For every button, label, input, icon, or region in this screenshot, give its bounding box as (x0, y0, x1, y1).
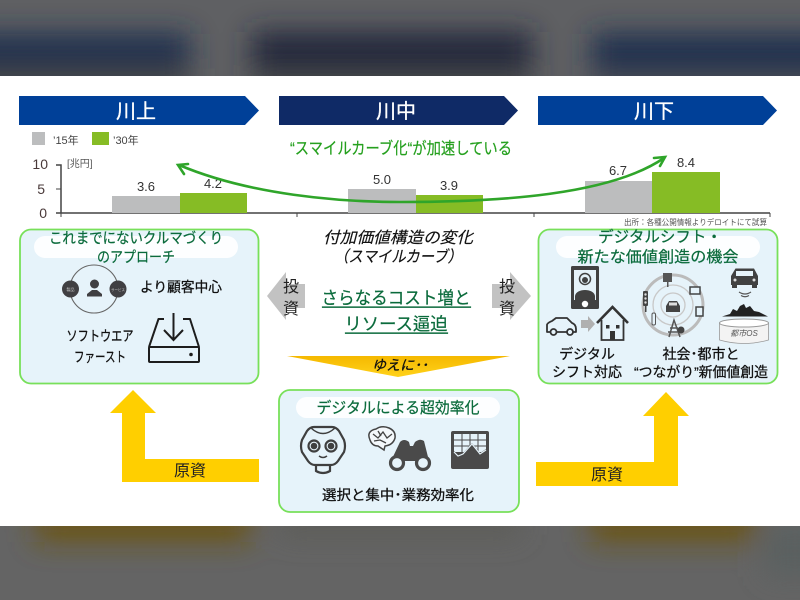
text: customer centric: より顧客中心 (140, 279, 222, 295)
icon: phone with operator (571, 266, 599, 309)
bars downstream: 6.7 (609, 163, 627, 178)
center message: cost and resource pressure: リソース逼迫 (344, 314, 448, 334)
arrow: right funding: 原資 (591, 466, 623, 484)
bars upstream: 4.2 (204, 176, 222, 191)
icon: house (597, 307, 628, 340)
icon: arrow car to house (581, 316, 595, 332)
icon: brain (369, 427, 395, 450)
bar chart (32, 155, 770, 221)
chart legend (32, 132, 139, 147)
arrow: left funding (110, 390, 259, 482)
header: 川下: 川下 (634, 101, 674, 123)
bars upstream (112, 176, 247, 213)
text: digital shift (552, 346, 622, 380)
icon: connected city radar (643, 273, 703, 337)
axis numbers: 5 (37, 181, 45, 197)
center heading: value structure change: 付加価値構造の変化 (323, 229, 474, 247)
arrow: right investment: 投 (499, 278, 515, 296)
center message: cost and resource pressure (322, 288, 471, 334)
right panel heading: デジタルシフト・ (598, 227, 722, 246)
yellow triangle: therefore: ゆえに･･ (372, 357, 428, 373)
panel: left approach (20, 230, 258, 384)
text: software first: ソフトウエア (66, 328, 134, 344)
text: software first (66, 328, 134, 365)
yellow triangle: therefore (287, 356, 510, 377)
smile curve arrow (178, 157, 665, 202)
blurred top background band (0, 0, 800, 76)
icon: mountain chart (451, 431, 489, 469)
arrow: right investment: 資 (499, 300, 515, 318)
panel: digital efficiency (279, 390, 519, 512)
arrow: right funding (536, 392, 689, 486)
icon: car with signal over city OS (720, 268, 768, 344)
bars midstream (348, 172, 483, 213)
arrow: right investment (492, 272, 531, 320)
header: 川中: 川中 (376, 100, 416, 123)
white content area (0, 76, 800, 526)
header: 川下 (538, 96, 777, 125)
blurred bottom background band (0, 526, 800, 600)
icon: customer circle: サービス (111, 287, 125, 292)
bars upstream: 3.6 (137, 179, 155, 194)
bars downstream: 8.4 (677, 155, 695, 170)
icon: customer circle (62, 265, 126, 313)
icon: car with signal over city OS: 都市OS (730, 329, 758, 338)
axis numbers: 0 (39, 205, 47, 221)
text: digital shift: シフト対応 (552, 364, 622, 380)
panel: right opportunity (538, 227, 778, 384)
arrow: left investment: 投 (283, 278, 299, 296)
icon: car (547, 318, 576, 335)
left panel heading: のアプローチ (97, 249, 175, 266)
chart legend: ’30年 (113, 133, 139, 147)
chart unit label: [兆円] (67, 158, 93, 170)
axis numbers (32, 156, 48, 221)
center heading: value structure change: （スマイルカーブ） (334, 248, 462, 266)
arrow: left investment (267, 272, 305, 320)
icon: robot (301, 427, 345, 473)
right panel heading (578, 227, 739, 266)
header: 川上: 川上 (116, 100, 156, 123)
bars midstream: 3.9 (440, 178, 458, 193)
smile curve heading: “スマイルカーブ化“が加速している (290, 138, 512, 158)
right panel heading: 新たな価値創造の機会 (578, 248, 739, 266)
icon: binoculars (390, 440, 430, 470)
arrow: left investment: 資 (283, 300, 299, 318)
efficiency heading: デジタルによる超効率化 (316, 398, 480, 417)
header: 川中 (279, 96, 518, 125)
left panel heading: これまでにないクルマづくり (49, 230, 223, 247)
axis numbers: 10 (32, 156, 48, 172)
header: 川上 (19, 96, 259, 125)
left panel heading (49, 230, 223, 266)
icon: customer circle: 製品 (66, 286, 74, 292)
text: society and city: “つながり”新価値創造 (634, 364, 768, 380)
bars downstream (585, 155, 720, 213)
text: society and city (634, 346, 768, 380)
bars midstream: 5.0 (373, 172, 391, 187)
text: software first: ファースト (74, 349, 126, 365)
text: selection and efficiency: 選択と集中･業務効率化 (322, 487, 474, 503)
icon: download drive (149, 313, 199, 362)
arrow: left funding: 原資 (174, 462, 206, 480)
text: society and city: 社会･都市と (662, 346, 740, 362)
source note: 出所：各種公開情報よりデロイトにて試算 (624, 217, 767, 227)
center message: cost and resource pressure: さらなるコスト増と (322, 288, 470, 308)
chart axis (56, 165, 770, 217)
text: digital shift: デジタル (559, 346, 615, 362)
chart legend: ’15年 (53, 133, 79, 147)
center heading: value structure change (323, 229, 474, 266)
